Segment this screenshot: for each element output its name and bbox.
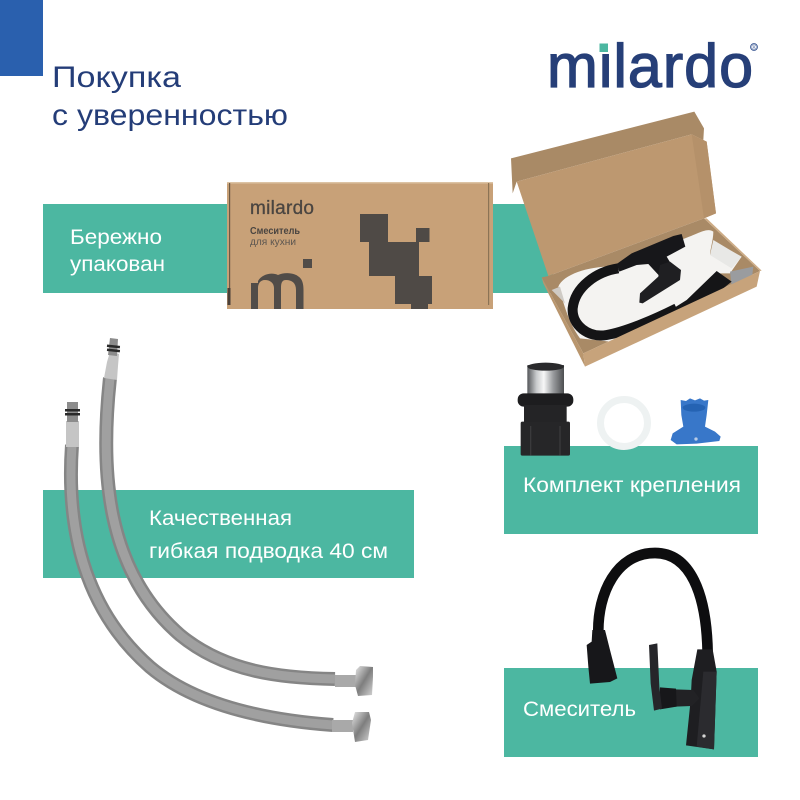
hose [573, 268, 677, 336]
closed kraft box [227, 182, 493, 309]
closed kraft box: milardo [250, 198, 314, 219]
panel: carefully packed band: упакован [70, 253, 165, 276]
towel [558, 230, 742, 342]
faucet body [617, 234, 685, 277]
panel: mounting kit band: Комплект крепления [523, 474, 741, 497]
spray head [673, 271, 732, 313]
faucet lever [639, 262, 681, 303]
panel: faucet band: Смеситель [523, 698, 636, 721]
black kitchen faucet [587, 553, 717, 749]
closed kraft box: для кухни [250, 236, 296, 248]
panel: flexible hoses band: Качественная [149, 507, 292, 530]
closed kraft box: Смеситель [250, 225, 300, 237]
panel: carefully packed band: Бережно [70, 226, 162, 249]
panel: carefully packed band [43, 204, 553, 293]
icon: threaded mounting nut [518, 363, 573, 456]
blue corner square [0, 0, 43, 76]
panel: flexible hoses band: гибкая подводка 40 см [149, 540, 388, 563]
lid inside [517, 134, 716, 276]
flexible hose: rear [104, 338, 373, 696]
title: Покупка [52, 61, 181, 94]
icon: white seal ring [600, 400, 648, 446]
flexible hose: front [65, 402, 371, 742]
walls [583, 271, 760, 367]
metal parts [730, 267, 753, 286]
icon: blue aerator key [671, 398, 721, 444]
lid flap [511, 112, 704, 193]
panel: mounting kit band [504, 446, 758, 534]
lid side flap [692, 134, 716, 218]
title [52, 61, 288, 132]
panel: flexible hoses band [43, 490, 414, 578]
open box with faucet [511, 112, 762, 367]
title: с уверенностью [52, 99, 288, 132]
logo: milardo: ® [752, 43, 757, 51]
logo: milardo: milardo [547, 32, 753, 100]
box floor [542, 218, 760, 353]
panel: faucet band [504, 668, 758, 757]
